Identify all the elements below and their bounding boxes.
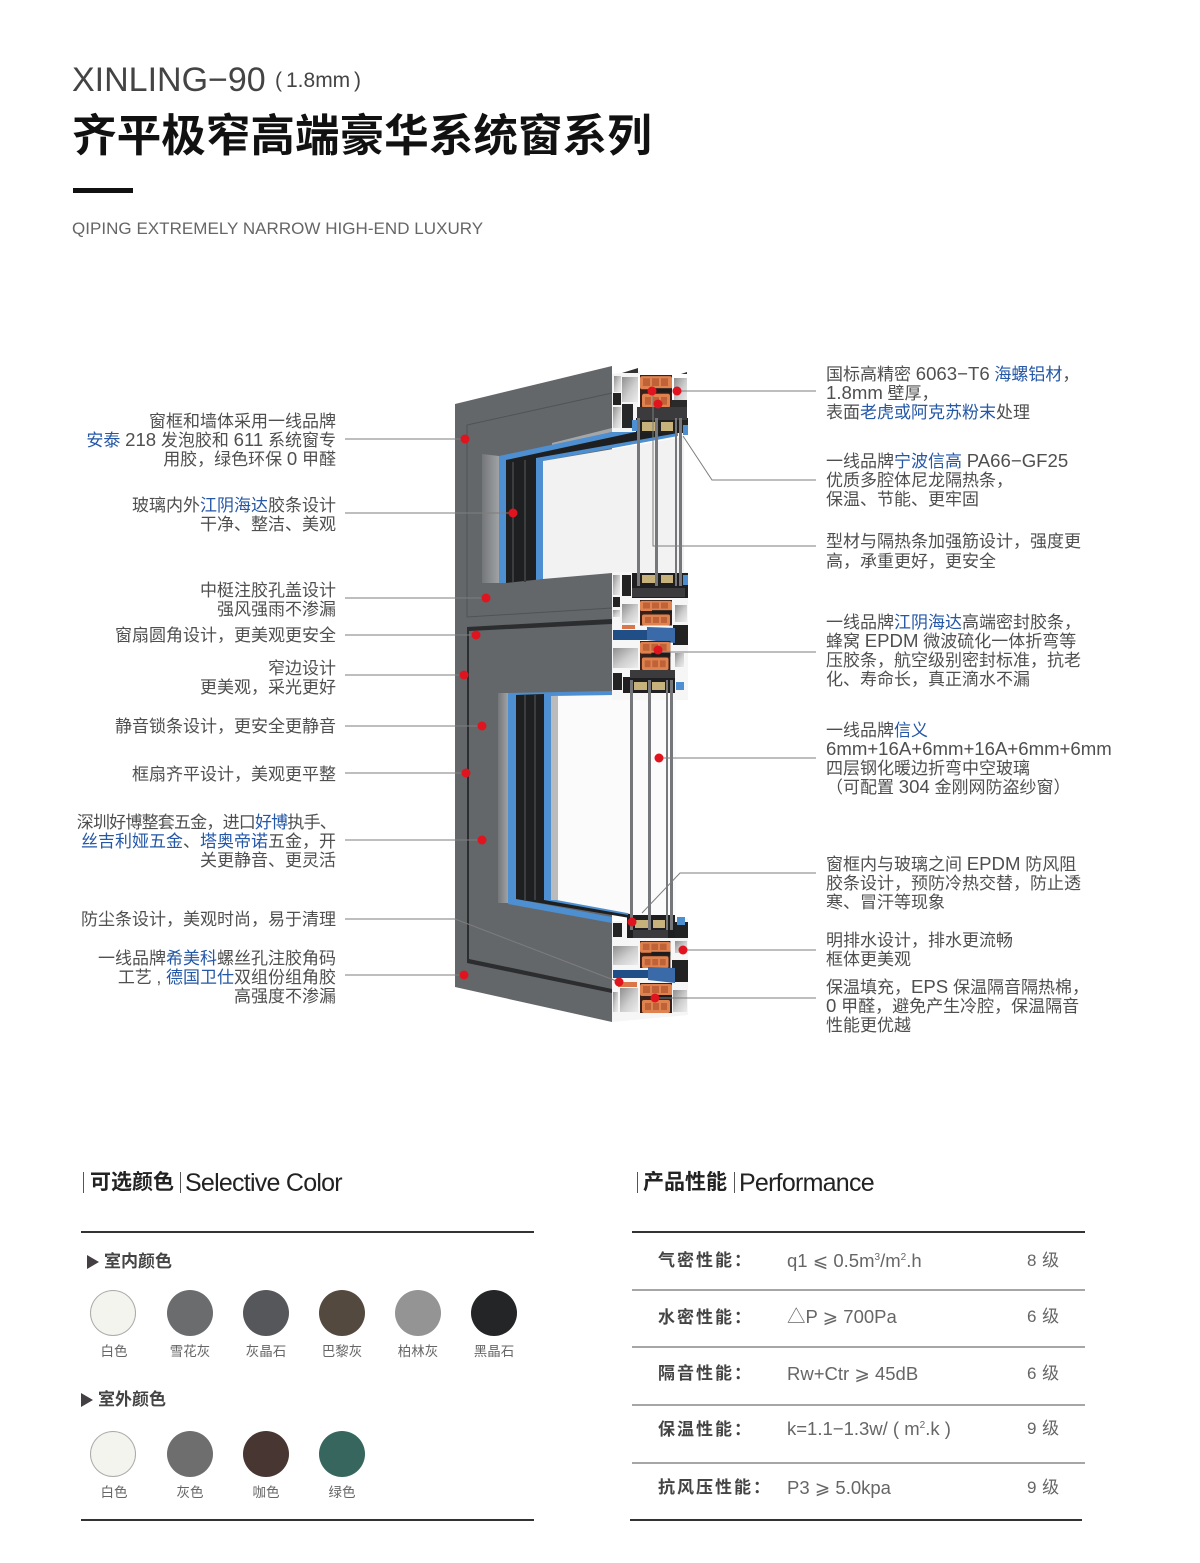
text: P3 ⩾ 5.0kpa xyxy=(787,1477,891,1498)
row: wind pressure: 抗风压性能： xyxy=(658,1478,772,1497)
left callout: corner glue: 工艺 , 德国卫仕双组份组角胶 xyxy=(118,968,336,987)
performance heading: Performance xyxy=(739,1169,874,1197)
left callout: corner glue: 一线品牌希美科螺丝孔注胶角码 xyxy=(98,949,336,968)
right callout: EPS: 保温填充，EPS 保温隔音隔热棉， xyxy=(826,976,1089,997)
english subtitle: QIPING EXTREMELY NARROW HIGH-END LUXURY xyxy=(72,219,483,238)
panel: selective color: 柏林灰 xyxy=(398,1344,438,1359)
right callout: glass: 一线品牌信义 xyxy=(826,721,928,740)
left callout: flush: 框扇齐平设计，美观更平整 xyxy=(132,765,336,784)
right callout: glass: 四层钢化暖边折弯中空玻璃 xyxy=(826,759,1030,778)
panel: selective color: 灰晶石 xyxy=(246,1344,286,1359)
title: 齐平极窄高端豪华系统窗系列 xyxy=(72,112,652,161)
left callout: rounded corner: 窗扇圆角设计，更美观更安全 xyxy=(115,626,336,645)
model name: XINLING−90 xyxy=(72,61,266,99)
row: air tightness: 气密性能： xyxy=(658,1251,753,1270)
right callout: gasket: 蜂窝 EPDM 微波硫化一体折弯等 xyxy=(826,630,1076,651)
left callout: glass seal xyxy=(132,496,336,534)
right callout: aluminium: 国标高精密 6063−T6 海螺铝材， xyxy=(826,363,1079,384)
right callout: drainage xyxy=(826,931,1013,969)
panel: middle profile section xyxy=(612,572,688,700)
panel: selective color: 灰色 xyxy=(176,1485,204,1500)
panel: selective color xyxy=(81,1169,534,1521)
text: △P ⩾ 700Pa xyxy=(787,1306,897,1327)
left callout: mullion xyxy=(200,581,336,619)
right callout: EPS xyxy=(826,976,1089,1035)
right callout: EPS: 0 甲醛，避免产生冷腔，保温隔音 xyxy=(826,995,1079,1016)
left callout: dust strip: 防尘条设计，美观时尚，易于清理 xyxy=(81,910,336,929)
row: thermal insulation: 保温性能： xyxy=(658,1420,753,1439)
right callout: aluminium: 1.8mm 壁厚， xyxy=(826,382,939,403)
right callout: EPDM: 寒、冒汗等现象 xyxy=(826,893,945,912)
color heading: Selective Color xyxy=(185,1169,342,1197)
right callout: reinforcement: 型材与隔热条加强筋设计，强度更 xyxy=(826,532,1081,551)
row: water tightness: 水密性能： xyxy=(658,1308,753,1327)
panel: lower glass panes xyxy=(630,680,673,930)
right callout: gasket: 一线品牌江阴海达高端密封胶条， xyxy=(826,613,1081,632)
right callout: EPDM xyxy=(826,853,1081,912)
right callout: reinforcement xyxy=(826,532,1081,571)
left callout: narrow edge xyxy=(200,659,336,697)
right callout: gasket: 化、寿命长，真正滴水不漏 xyxy=(826,670,1030,689)
outdoor heading: 室外颜色 xyxy=(98,1390,166,1409)
right callout: reinforcement: 高，承重更好，更安全 xyxy=(826,552,996,571)
left callout: hardware: 丝吉利娅五金、塔奥帝诺五金，开 xyxy=(81,832,336,851)
right callout: aluminium xyxy=(826,363,1079,422)
left callout: hardware xyxy=(77,813,336,870)
text: 9 级 xyxy=(1027,1478,1060,1497)
indoor swatch names: 白色 xyxy=(100,1344,128,1359)
text: k=1.1−1.3w/ ( m2.k ) xyxy=(787,1418,951,1439)
right callout: glass: （可配置 304 金刚网防盗纱窗） xyxy=(826,776,1070,797)
model name xyxy=(72,61,361,99)
panel: selective color: 巴黎灰 xyxy=(322,1344,362,1359)
left callout: sealant: 窗框和墙体采用一线品牌 xyxy=(149,412,336,431)
text: Rw+Ctr ⩾ 45dB xyxy=(787,1363,918,1384)
text: 8 级 xyxy=(1027,1251,1060,1270)
left callout: glass seal: 干净、整洁、美观 xyxy=(200,515,336,534)
model name: ) xyxy=(354,69,361,92)
panel: frame face xyxy=(455,366,612,1022)
left callout: mullion: 中梃注胶孔盖设计 xyxy=(200,581,336,600)
right callout: drainage: 明排水设计，排水更流畅 xyxy=(826,931,1013,950)
left callout: hardware: 关更静音、更灵活 xyxy=(200,851,336,870)
right callout: gasket xyxy=(826,613,1081,689)
table rules xyxy=(630,1231,1085,1521)
outdoor swatch names: 白色 xyxy=(100,1485,128,1500)
left callout: hardware: 深圳好博整套五金，进口好博执手、 xyxy=(77,813,336,832)
right callout: thermal strip xyxy=(826,450,1068,509)
right callout: gasket: 压胶条，航空级别密封标准，抗老 xyxy=(826,651,1081,670)
text: q1 ⩽ 0.5m3/m2.h xyxy=(787,1250,922,1271)
indoor heading: 室内颜色 xyxy=(104,1252,172,1271)
text: 6 级 xyxy=(1027,1307,1060,1326)
color heading: 可选颜色 xyxy=(90,1171,174,1194)
right callout: EPDM: 胶条设计，预防冷热交替，防止透 xyxy=(826,874,1081,893)
performance heading: 产品性能 xyxy=(643,1171,727,1194)
indoor swatches xyxy=(90,1290,136,1336)
color heading xyxy=(83,1169,342,1197)
left callout: narrow edge: 更美观，采光更好 xyxy=(200,678,336,697)
right callout: thermal strip: 优质多腔体尼龙隔热条， xyxy=(826,471,1013,490)
left callout: corner glue: 高强度不渗漏 xyxy=(234,987,336,1006)
row: sound insulation: 隔音性能： xyxy=(658,1364,753,1383)
left callout: glass seal: 玻璃内外江阴海达胶条设计 xyxy=(132,496,336,515)
left callout: lock strip: 静音锁条设计，更安全更静音 xyxy=(115,717,336,736)
red marker dots xyxy=(460,386,688,1002)
window cross-section diagram xyxy=(345,366,816,1022)
outdoor swatches xyxy=(90,1431,136,1477)
panel: upper glass panes xyxy=(637,418,682,586)
panel: selective color: 黑晶石 xyxy=(474,1344,514,1359)
right callout: thermal strip: 一线品牌宁波信高 PA66−GF25 xyxy=(826,450,1068,471)
right callout: aluminium: 表面老虎或阿克苏粉末处理 xyxy=(826,403,1030,422)
panel: selective color: 咖色 xyxy=(252,1485,280,1500)
panel: lower glazing xyxy=(498,691,676,923)
left callout: narrow edge: 窄边设计 xyxy=(268,659,336,678)
title accent bar xyxy=(73,188,133,193)
left callout: sealant: 安泰 218 发泡胶和 611 系统窗专 xyxy=(86,429,336,450)
right callout: EPDM: 窗框内与玻璃之间 EPDM 防风阻 xyxy=(826,853,1076,874)
panel: selective color: 绿色 xyxy=(328,1485,356,1500)
panel: top profile section xyxy=(612,368,688,435)
text: 6 级 xyxy=(1027,1364,1060,1383)
right callout: glass: 6mm+16A+6mm+16A+6mm+6mm xyxy=(826,738,1112,759)
panel: upper glazing xyxy=(482,428,684,583)
text: 9 级 xyxy=(1027,1419,1060,1438)
right callout: EPS: 性能更优越 xyxy=(826,1016,911,1035)
performance heading xyxy=(637,1169,874,1197)
left callout: sealant xyxy=(86,412,336,469)
leader lines xyxy=(345,391,816,998)
model name: 1.8mm xyxy=(286,69,350,92)
model name: ( xyxy=(275,69,282,92)
left callout: mullion: 强风强雨不渗漏 xyxy=(217,600,336,619)
left callout: corner glue xyxy=(98,949,336,1006)
panel: bottom profile section xyxy=(612,915,688,1022)
right callout: glass xyxy=(826,721,1112,797)
left callout: sealant: 用胶，绿色环保 0 甲醛 xyxy=(163,448,336,469)
right callout: drainage: 框体更美观 xyxy=(826,950,911,969)
right callout: thermal strip: 保温、节能、更牢固 xyxy=(826,490,979,509)
panel: selective color: 雪花灰 xyxy=(170,1344,210,1359)
